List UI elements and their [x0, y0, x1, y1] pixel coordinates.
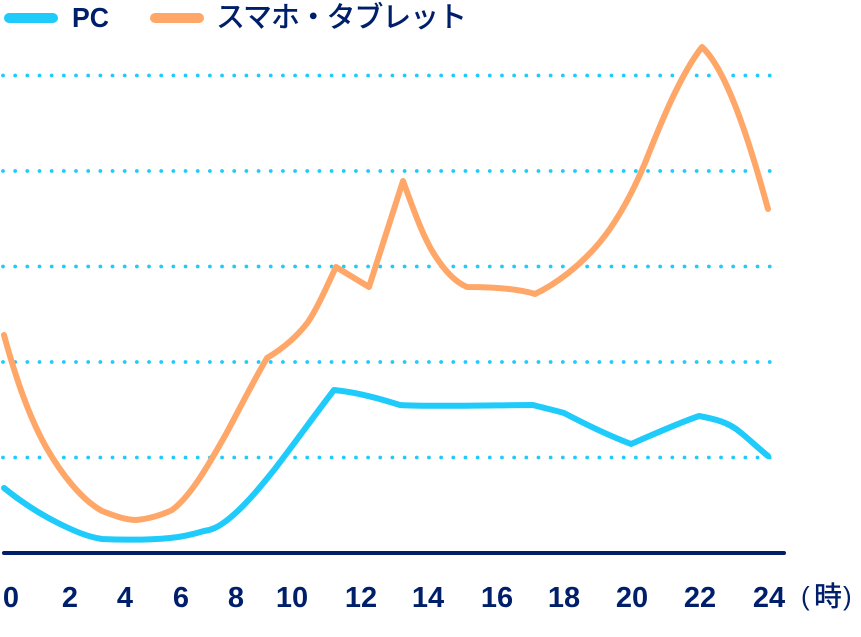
- x axis hour labels: 20: [616, 582, 648, 614]
- x axis hour labels: 10: [276, 582, 308, 614]
- line: smartphone and tablet: [4, 47, 768, 520]
- x axis unit label: [801, 581, 852, 612]
- legend: smartphone and tablet: スマホ・タブレット: [216, 1, 467, 34]
- x axis hour labels: 6: [173, 582, 189, 614]
- x axis hour labels: 14: [412, 582, 444, 614]
- x axis hour labels: 24: [753, 582, 785, 614]
- legend: PC: [4, 2, 109, 33]
- x axis unit label: (: [801, 581, 810, 611]
- x axis hour labels: 18: [548, 582, 580, 614]
- x axis hour labels: 22: [684, 582, 716, 614]
- x axis unit label: ): [843, 581, 852, 611]
- x axis hour labels: 2: [62, 582, 78, 614]
- x axis unit label: 時: [814, 581, 842, 612]
- x axis hour labels: 0: [3, 582, 19, 614]
- x axis hour labels: 8: [228, 582, 244, 614]
- legend: PC: PC: [72, 2, 109, 33]
- x axis hour labels: 12: [345, 582, 377, 614]
- line: PC: [4, 390, 768, 540]
- x axis hour labels: 16: [481, 582, 513, 614]
- x axis line: [4, 551, 784, 555]
- x axis hour labels: 4: [117, 582, 133, 614]
- x axis hour labels: [3, 582, 785, 614]
